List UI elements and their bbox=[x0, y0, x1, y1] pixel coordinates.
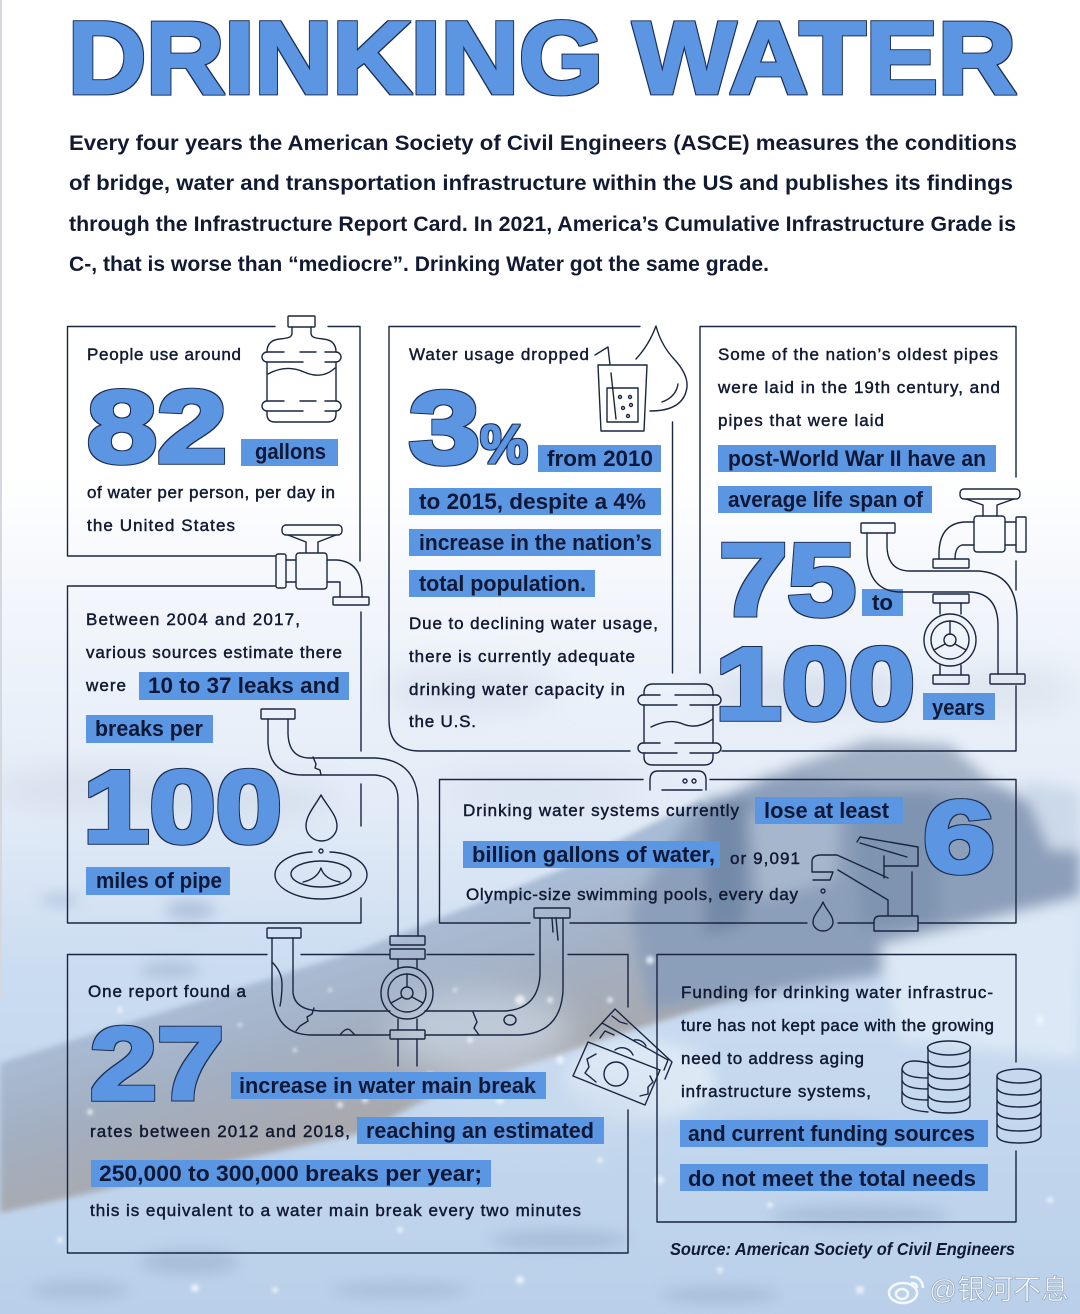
panel: 27 percent increase in water main breaks: rates between 2012 and 2018, bbox=[90, 1122, 350, 1141]
panel: 3% water usage dropped: to 2015, despite a 4% bbox=[419, 489, 646, 514]
panel: 3% water usage dropped: Due to declining water usage, bbox=[409, 614, 658, 633]
panel: 3% water usage dropped: drinking water capacity in bbox=[409, 680, 625, 699]
icon: water cooler bbox=[638, 684, 721, 790]
panel: funding: infrastructure systems, bbox=[681, 1082, 871, 1101]
icon: stack of banknotes bbox=[573, 1009, 672, 1105]
panel: 75 to 100 years pipe life span: 75 bbox=[719, 523, 856, 637]
panel: 27 percent increase in water main breaks: increase in water main break bbox=[239, 1073, 537, 1098]
panel: 3% water usage dropped bbox=[389, 326, 672, 751]
panel: 100 miles of pipe leaks: 10 to 37 leaks and bbox=[148, 673, 340, 698]
panel: 82 gallons: People use around bbox=[87, 345, 241, 364]
panel: 3% water usage dropped: Water usage dropped bbox=[409, 345, 589, 364]
panel: funding bbox=[657, 954, 1016, 1222]
panel: 6 billion gallons lost: 6 bbox=[923, 780, 995, 894]
panel: 100 miles of pipe leaks: Between 2004 and 2017, bbox=[86, 610, 300, 629]
intro paragraph: Every four years the American Society of Civil Engineers (ASCE) measures the conditions bbox=[69, 131, 1017, 155]
icon: coin stacks bbox=[902, 1041, 1041, 1143]
panel: 3% water usage dropped: 3 bbox=[409, 371, 480, 485]
panel: funding: Funding for drinking water infrastruc- bbox=[681, 983, 993, 1002]
icon: faucet bbox=[276, 525, 369, 605]
panel: 82 gallons bbox=[68, 326, 360, 561]
source note: Source: American Society of Civil Engineers bbox=[670, 1239, 1015, 1259]
intro paragraph: of bridge, water and transportation infrastructure within the US and publishes its findings bbox=[69, 171, 1013, 195]
panel: 82 gallons: the United States bbox=[87, 516, 235, 535]
panel: funding: and current funding sources bbox=[688, 1121, 975, 1146]
panel: 75 to 100 years pipe life span bbox=[700, 326, 1016, 751]
panel: 3% water usage dropped: there is currently adequate bbox=[409, 647, 635, 666]
panel: 75 to 100 years pipe life span: pipes that were laid bbox=[718, 411, 884, 430]
pipe band bbox=[0, 800, 880, 1213]
icon: tap with drip bbox=[812, 837, 918, 931]
panel: 75 to 100 years pipe life span: average life span of bbox=[728, 487, 924, 512]
panel: 100 miles of pipe leaks: breaks per bbox=[95, 716, 203, 741]
panel: 100 miles of pipe leaks: 100 bbox=[83, 750, 282, 864]
panel: 82 gallons: 82 bbox=[87, 370, 227, 484]
panel: 100 miles of pipe leaks bbox=[68, 586, 361, 923]
panel: 27 percent increase in water main breaks: 27 bbox=[90, 1007, 224, 1121]
title: DRINKING WATER bbox=[68, 1, 1016, 115]
intro paragraph bbox=[69, 131, 1017, 276]
panel: 75 to 100 years pipe life span: to bbox=[872, 590, 893, 615]
panel: 6 billion gallons lost: Drinking water systems currently bbox=[463, 801, 740, 820]
panel: 27 percent increase in water main breaks: reaching an estimated bbox=[366, 1118, 594, 1143]
intro paragraph: through the Infrastructure Report Card. In 2021, America’s Cumulative Infrastructure Grade is bbox=[69, 212, 1016, 236]
icon: water drop and ripple bbox=[275, 795, 367, 899]
panel: funding: do not meet the total needs bbox=[688, 1166, 976, 1191]
panel: 3% water usage dropped: total population. bbox=[419, 571, 586, 596]
panel: 3% water usage dropped: from 2010 bbox=[547, 446, 653, 471]
panel: 100 miles of pipe leaks: various sources estimate there bbox=[86, 643, 342, 662]
panel: 82 gallons: gallons bbox=[255, 439, 326, 464]
panel: 27 percent increase in water main breaks: 250,000 to 300,000 breaks per year; bbox=[99, 1161, 482, 1186]
panel: 75 to 100 years pipe life span: were laid in the 19th century, and bbox=[717, 378, 1000, 397]
icon: cracked pipe running to valve bbox=[261, 709, 418, 936]
panel: 100 miles of pipe leaks: miles of pipe bbox=[96, 868, 222, 893]
panel: 75 to 100 years pipe life span: years bbox=[932, 695, 985, 720]
panel: funding: need to address aging bbox=[681, 1049, 864, 1068]
panel: 100 miles of pipe leaks: were bbox=[85, 676, 126, 695]
panel: 6 billion gallons lost: billion gallons of water, bbox=[472, 842, 715, 867]
panel: 75 to 100 years pipe life span: post-World War II have an bbox=[728, 446, 986, 471]
panel: 27 percent increase in water main breaks: One report found a bbox=[88, 982, 247, 1001]
icon: faucet with pipe and valve bbox=[861, 489, 1026, 684]
panel: 75 to 100 years pipe life span: Some of the nation’s oldest pipes bbox=[718, 345, 998, 364]
panel: 6 billion gallons lost: or 9,091 bbox=[730, 849, 800, 868]
icon: glass of water and drop bbox=[595, 326, 687, 431]
panel: 3% water usage dropped: % bbox=[480, 413, 528, 475]
panel: 6 billion gallons lost: lose at least bbox=[764, 798, 890, 823]
panel: 6 billion gallons lost bbox=[440, 780, 1016, 923]
watermark: @银河不息 bbox=[929, 1274, 1069, 1305]
panel: 75 to 100 years pipe life span: 100 bbox=[715, 627, 915, 741]
icon: valve and corroded U pipe bbox=[267, 908, 570, 1066]
panel: 3% water usage dropped: increase in the nation’s bbox=[419, 530, 652, 555]
panel: 27 percent increase in water main breaks: this is equivalent to a water main break every two minutes bbox=[90, 1201, 581, 1220]
panel: 3% water usage dropped: the U.S. bbox=[409, 712, 476, 731]
icon: water bottle bbox=[262, 316, 341, 422]
intro paragraph: C-, that is worse than “mediocre”. Drinking Water got the same grade. bbox=[69, 252, 769, 276]
panel: 82 gallons: of water per person, per day in bbox=[87, 483, 335, 502]
panel: 6 billion gallons lost: Olympic-size swimming pools, every day bbox=[466, 885, 798, 904]
panel: 27 percent increase in water main breaks bbox=[68, 954, 628, 1253]
panel: funding: ture has not kept pace with the growing bbox=[681, 1016, 994, 1035]
